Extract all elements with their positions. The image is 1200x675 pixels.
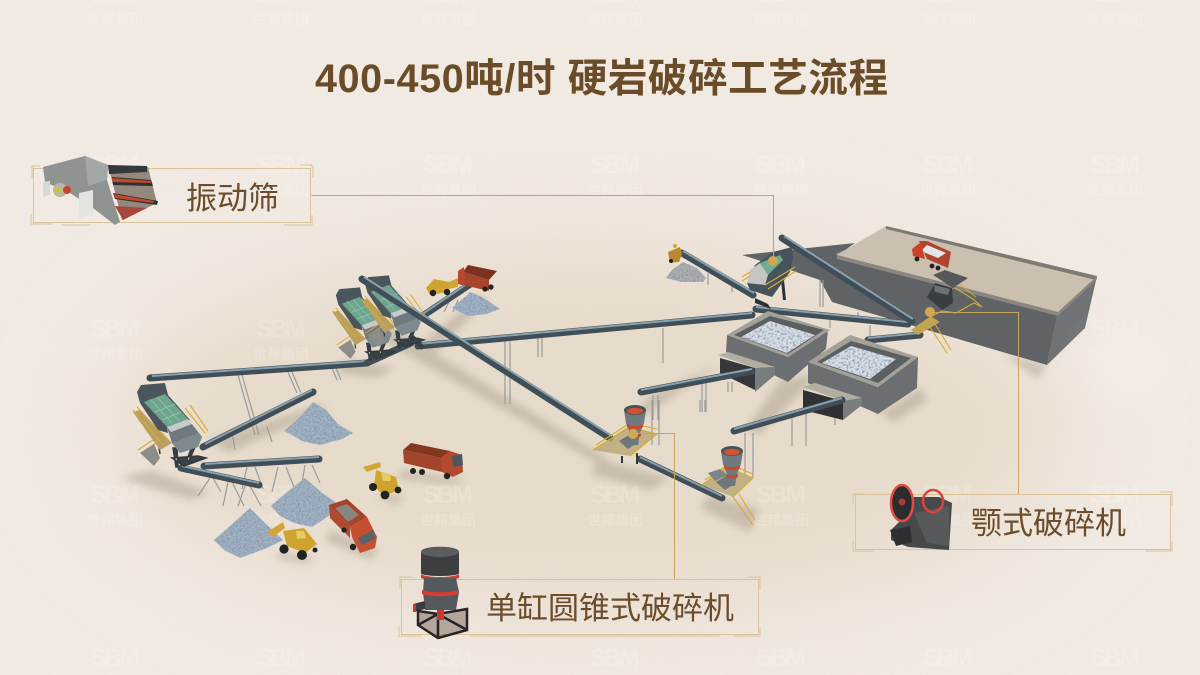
loader c [426,278,458,296]
supports [198,273,870,506]
leader: vibrating screen [312,196,778,266]
truck b [329,499,377,553]
stock bin two [803,335,918,420]
conveyors [150,251,920,485]
label: jaw crusher [853,485,1172,551]
loader b [267,522,318,560]
title: 400-450吨/时 硬岩破碎工艺流程 [315,57,888,101]
frame [31,165,313,225]
label: vibrating screen [31,156,313,225]
truck c [458,265,497,292]
pile 3 [214,508,283,558]
dump truck on platform [912,241,951,270]
conveyor: upper left [682,251,754,295]
wheel loaders [267,244,682,560]
ground shadows [120,295,1047,564]
conveyor: from jaw to bin [756,307,908,324]
cone crusher two [702,446,755,525]
conveyor: bin one feed [641,369,752,392]
long conveyors top layer [362,236,913,498]
label: cone crusher [399,547,760,638]
conveyor: long diagonal [362,277,612,438]
stock bin one [718,311,830,392]
icon: vibrating screen [43,156,158,225]
middle screening station b [361,275,426,348]
conveyor: cone to cone [640,457,722,498]
top right vibrating screen [742,247,796,309]
dump trucks [329,265,497,553]
conveyor: lower left [181,466,259,485]
pile 1 [284,402,353,445]
stockpiles [214,262,706,558]
pile 4 [452,292,500,316]
icon: jaw crusher [890,485,952,550]
conveyor: bin two feed [734,398,842,431]
conveyor: lower right [204,457,319,466]
frame [853,492,1172,551]
truck a [403,443,463,479]
conveyor: to top truck [424,279,475,315]
text: 颚式破碎机 [971,506,1126,541]
cone crusher one [593,405,657,464]
text: 振动筛 [186,181,279,216]
conveyor: middle long [418,313,752,346]
leader: cone crusher [628,429,674,579]
loader d [668,244,682,263]
frame [399,577,760,636]
callout leader lines [312,196,1018,579]
text: 单缸圆锥式破碎机 [486,591,734,626]
middle screening station a [332,287,397,360]
left screening station [133,383,208,467]
pile 2 [271,478,342,527]
loader a [363,462,401,499]
conveyor: short feed [868,333,920,340]
conveyor: left top [150,361,367,378]
icon: cone crusher [413,547,467,638]
conveyor: upper right diagonal [782,236,913,321]
conveyor: left discharge [203,390,313,447]
jaw crusher with stairs [911,283,982,353]
leader: jaw crusher [925,307,1018,494]
pile 5 [666,262,706,282]
conveyor: middle collector [367,335,423,363]
feed platform [742,226,1170,406]
